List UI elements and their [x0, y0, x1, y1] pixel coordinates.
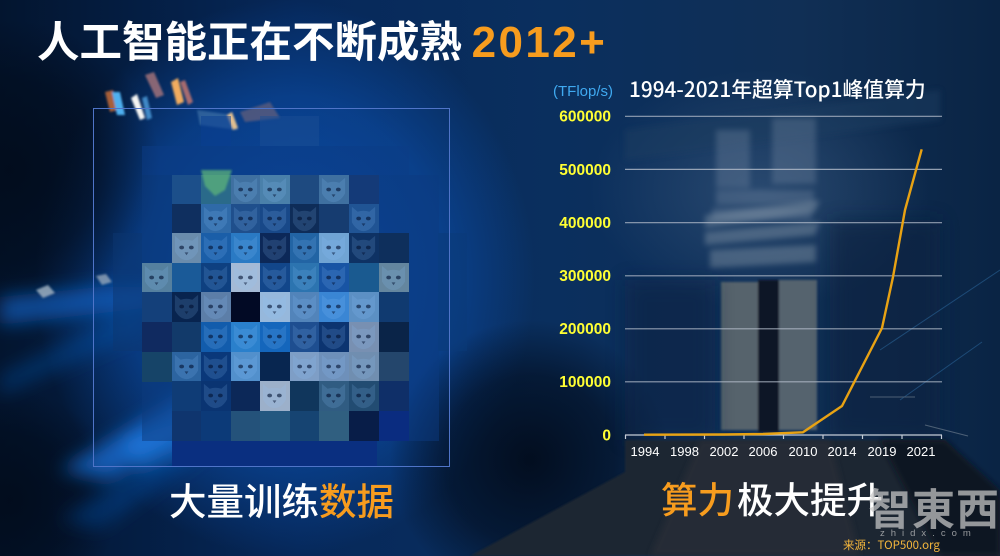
x axis labels: 2002	[710, 444, 738, 459]
x axis labels: 1994	[631, 444, 659, 459]
image panel: grid of cat photos	[113, 116, 467, 466]
x axis labels: 2010	[789, 444, 817, 459]
x axis labels: 2021	[907, 444, 935, 459]
y axis labels: 0	[602, 428, 611, 444]
x axis labels: 2006	[749, 444, 777, 459]
y axis labels	[559, 108, 611, 444]
y axis labels: 300000	[559, 268, 611, 285]
faint right side rack lines	[870, 270, 1000, 436]
x axis labels	[631, 444, 935, 459]
coloured bokeh chips at top of image	[36, 72, 280, 298]
x axis labels: 2014	[828, 444, 856, 459]
y axis labels: 400000	[559, 215, 611, 232]
data line	[644, 149, 922, 435]
y axis labels: 600000	[559, 108, 611, 126]
y axis labels: 500000	[559, 162, 611, 179]
x axis labels: 1998	[670, 444, 699, 459]
chart title: 1994-2021年超算Top1峰值算力	[629, 73, 926, 103]
watermark: zhidx logo: 智東西	[868, 476, 1000, 538]
image frame	[93, 108, 450, 466]
title: 人工智能正在不断成熟 2012+	[37, 9, 607, 70]
watermark: zhidx logo: zhidx.com	[880, 528, 977, 539]
caption: compute power: 算力极大提升	[661, 471, 883, 524]
right hall: ceiling, doors and floor	[470, 90, 1000, 556]
left light streaks	[0, 287, 260, 530]
y axis labels: 100000	[559, 374, 611, 391]
caption: training data: 大量训练数据	[169, 471, 394, 526]
chart unit label: (TFlop/s)	[553, 83, 613, 100]
x axis labels: 2019	[868, 444, 896, 459]
green light flare over grid	[201, 170, 232, 196]
y axis labels: 200000	[559, 321, 611, 338]
source note: 来源：TOP500.org	[843, 537, 940, 553]
